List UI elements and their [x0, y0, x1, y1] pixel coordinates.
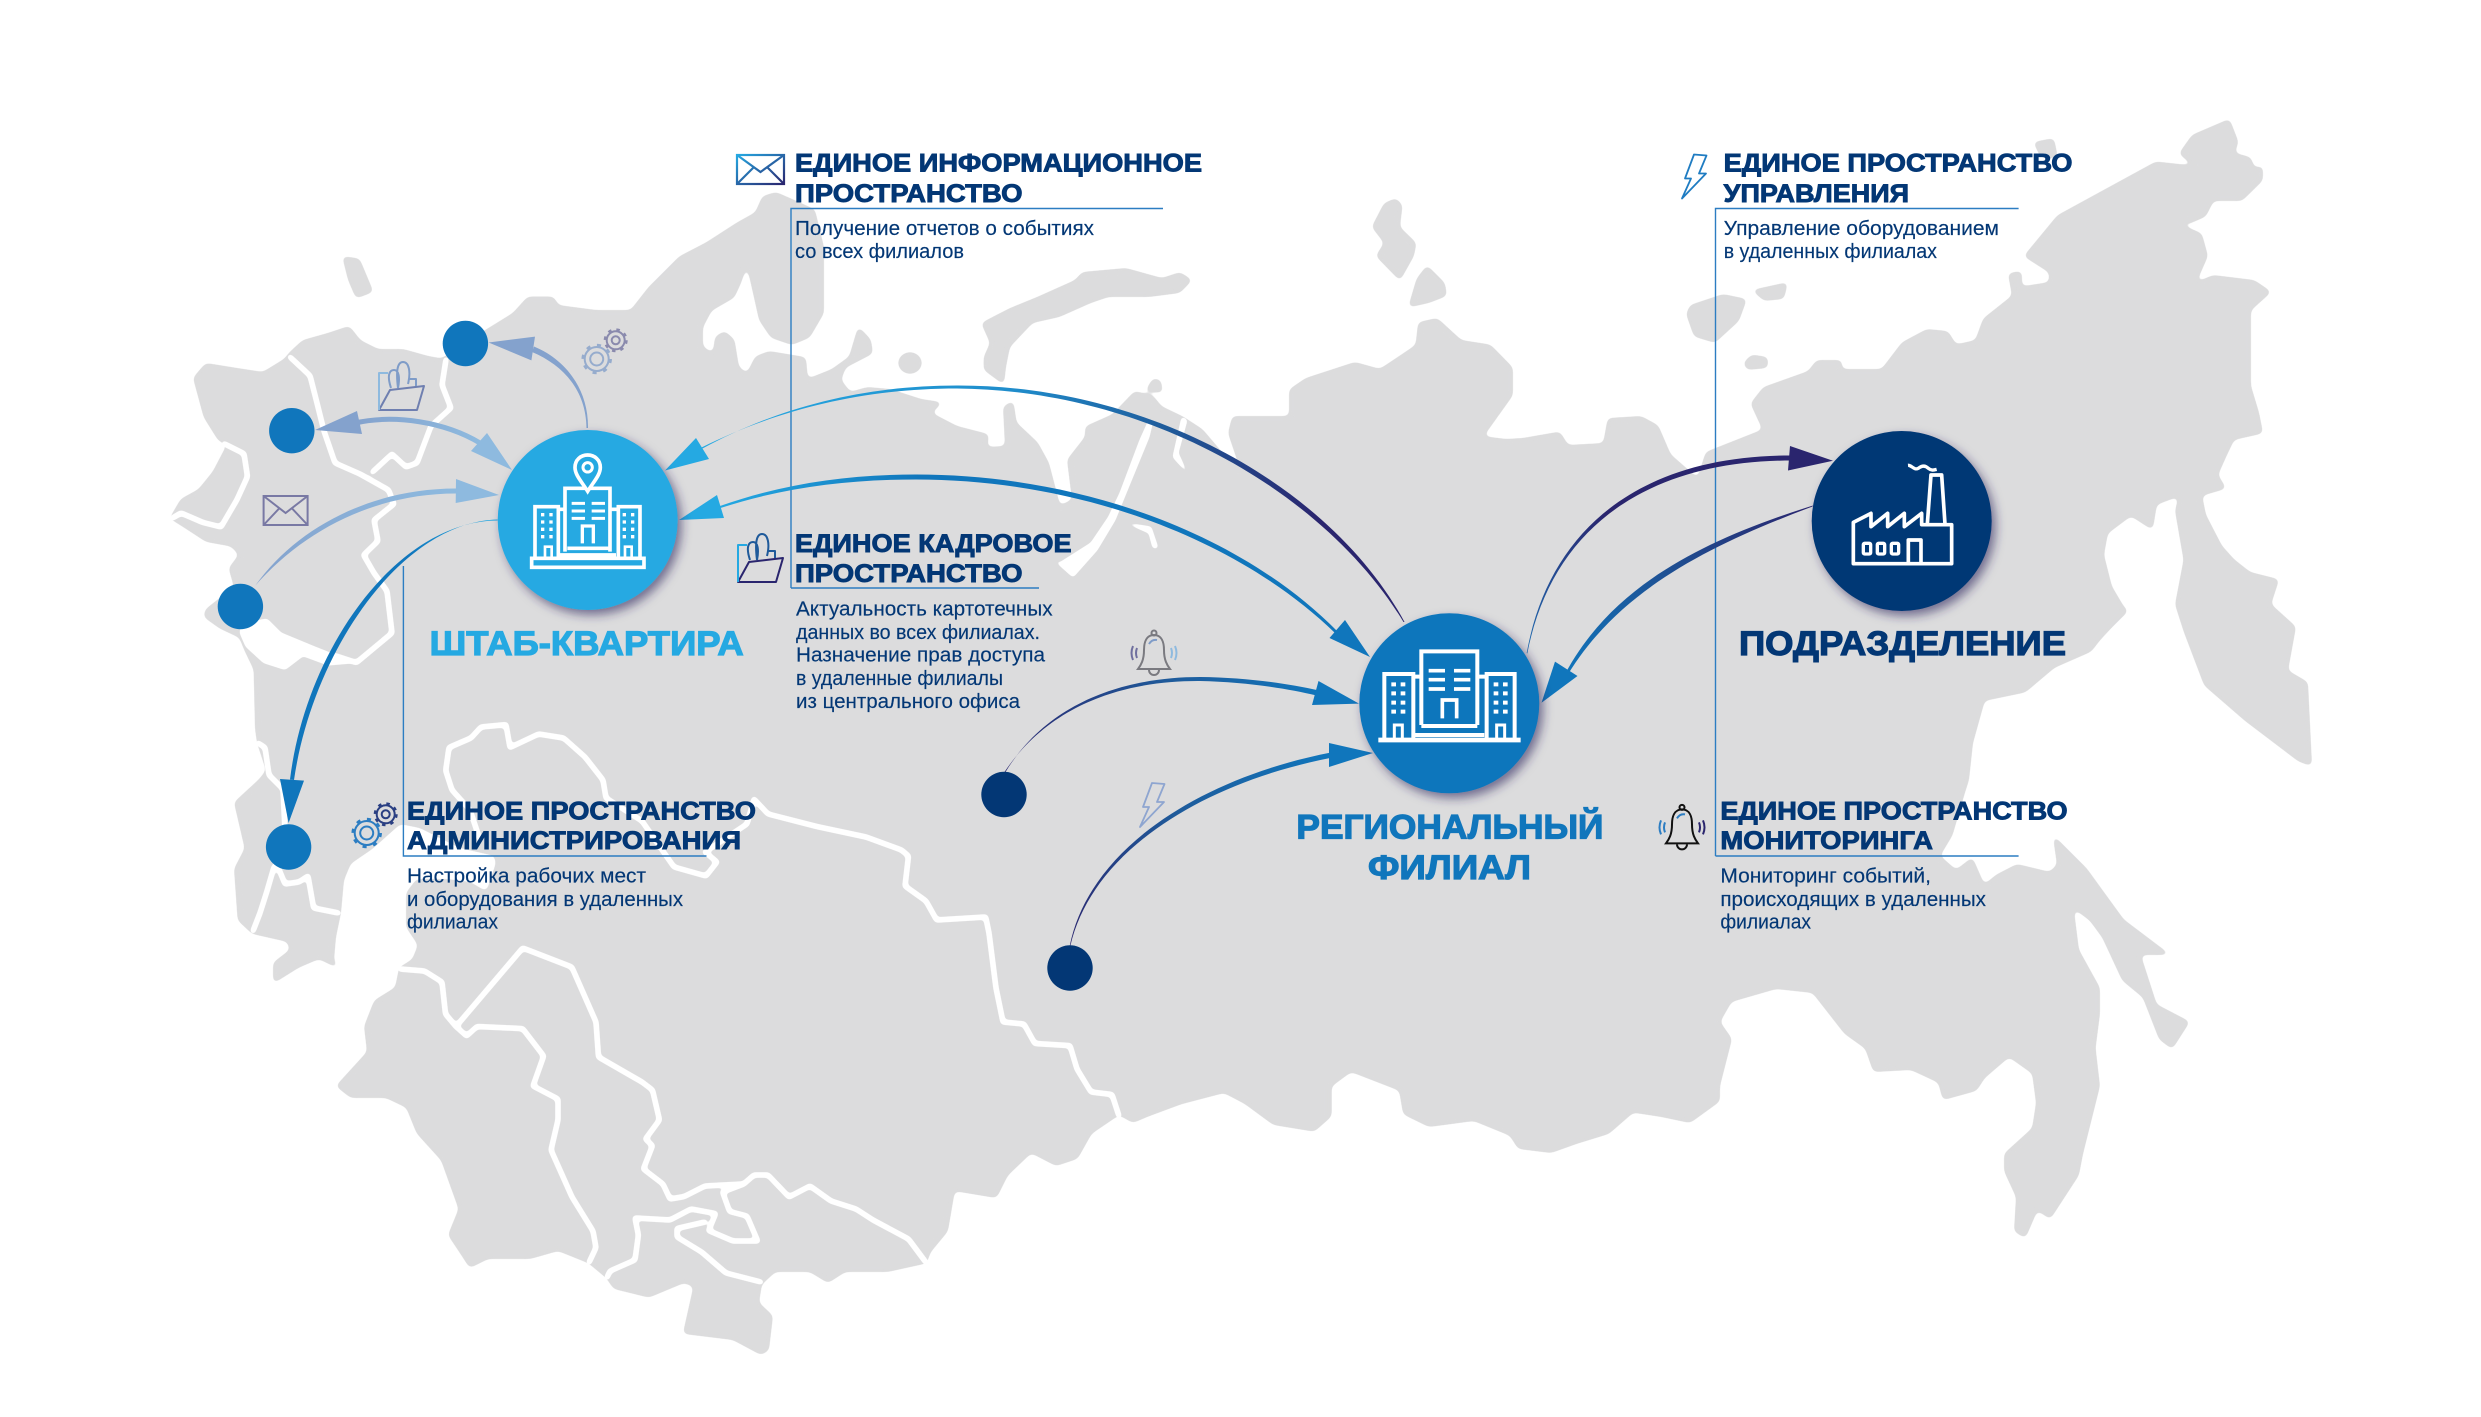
- heading: regional branch: РЕГИОНАЛЬНЫЙ: [1296, 808, 1603, 846]
- text block: management space: УПРАВЛЕНИЯ: [1724, 180, 1909, 208]
- node: regional branch circle with building icon: [1359, 613, 1539, 793]
- map island: New Siberian 1: [1686, 294, 1747, 343]
- icon: gears muted: [583, 330, 626, 372]
- text block: HR space: Актуальность картотечных: [796, 599, 1053, 621]
- arrow: subdivision to regional branch: [1542, 506, 1813, 703]
- text block: management space: [1724, 149, 2072, 263]
- map island: New Siberian 3: [1743, 354, 1768, 370]
- icon: building with location pin: [532, 455, 644, 567]
- icon: bell muted: [1132, 630, 1176, 675]
- text block: administration space: АДМИНИСТРИРОВАНИЯ: [407, 827, 741, 855]
- icon: envelope muted: [264, 496, 308, 525]
- map: national borders: [172, 357, 1119, 1282]
- text block: monitoring space: происходящих в удаленных: [1720, 889, 1986, 911]
- branch dot: lower left: [218, 584, 263, 629]
- icon: gears: [353, 804, 396, 846]
- map island: Novaya Zemlya: [981, 268, 1192, 385]
- heading: subdivision: ПОДРАЗДЕЛЕНИЕ: [1739, 625, 2066, 663]
- water: inner gulfs and lakes: [240, 413, 2234, 670]
- text block: administration space: филиалах: [407, 912, 498, 934]
- callout frame lines: [403, 208, 2019, 856]
- map island: New Siberian 2: [1752, 282, 1788, 301]
- branch dot: left: [269, 408, 314, 453]
- map: CIS territory: [171, 120, 2311, 1354]
- map mainland: [171, 120, 2311, 1354]
- text block: management space: ЕДИНОЕ ПРОСТРАНСТВО: [1724, 149, 2072, 177]
- text block: information space: [795, 149, 1202, 263]
- text block: administration space: [407, 797, 756, 934]
- text block: administration space: Настройка рабочих мест: [407, 866, 646, 888]
- text block: administration space: ЕДИНОЕ ПРОСТРАНСТВО: [407, 797, 756, 825]
- text block: monitoring space: [1720, 797, 2068, 934]
- arrow: regional branch to HQ, upper arc: [665, 385, 1404, 622]
- icon: factory: [1853, 465, 1952, 564]
- map island: Wrangel: [2033, 138, 2058, 158]
- text block: HR space: Назначение прав доступа: [796, 645, 1046, 667]
- text block: administration space: и оборудования в удаленных: [407, 889, 683, 911]
- arrow: HQ to top branch dot: [489, 337, 588, 428]
- text block: management space: в удаленных филиалах: [1724, 241, 1937, 263]
- map island: small arctic 2: [1145, 378, 1163, 393]
- map island: small arctic: [898, 352, 922, 374]
- icon: lightning bolt muted: [1140, 783, 1164, 827]
- text block: information space: Получение отчетов о событиях: [795, 218, 1094, 240]
- branch dot: top: [443, 321, 488, 366]
- branch dot: south: [266, 824, 311, 870]
- arrow: HQ to south branch dot: [280, 520, 498, 823]
- arrow: dark dot two to regional branch: [1070, 743, 1373, 946]
- subdivision dot: one: [981, 772, 1027, 817]
- text block: monitoring space: МОНИТОРИНГА: [1720, 827, 1933, 855]
- text block: information space: со всех филиалов: [795, 241, 964, 263]
- node: subdivision circle with factory icon: [1812, 431, 1992, 611]
- icon: lightning bolt: [1682, 154, 1706, 198]
- text block: HR space: из центрального офиса: [796, 691, 1021, 713]
- heading: regional branch: [1296, 808, 1603, 887]
- subdivision dot: two: [1047, 945, 1093, 991]
- text block: HR space: в удаленные филиалы: [796, 668, 1003, 690]
- icon: office buildings: [1378, 651, 1521, 740]
- text block: information space: ПРОСТРАНСТВО: [795, 180, 1022, 208]
- heading: headquarters: ШТАБ-КВАРТИРА: [430, 625, 744, 663]
- text block: HR space: ПРОСТРАНСТВО: [795, 560, 1022, 588]
- text block: management space: Управление оборудованием: [1724, 218, 1999, 240]
- arrow: HQ and left branch dot, two-way: [315, 411, 512, 470]
- text block: HR space: ЕДИНОЕ КАДРОВОЕ: [795, 530, 1072, 558]
- text block: monitoring space: ЕДИНОЕ ПРОСТРАНСТВО: [1720, 797, 2068, 825]
- text block: information space: ЕДИНОЕ ИНФОРМАЦИОННОЕ: [795, 149, 1202, 177]
- map island: Severnaya Zemlya 1: [1372, 198, 1416, 281]
- icon: bell: [1660, 805, 1704, 849]
- arrow: HQ to regional branch, lower arc: [679, 474, 1370, 657]
- text block: HR space: [795, 530, 1072, 713]
- icon: folder with people muted: [379, 362, 424, 410]
- map island: Svalbard-like: [342, 256, 374, 299]
- node: headquarters circle with building and pin icon: [498, 430, 678, 610]
- icon: folder with people: [738, 534, 783, 582]
- arrow: lower left branch dot to HQ: [254, 479, 499, 586]
- text block: monitoring space: Мониторинг событий,: [1720, 866, 1931, 888]
- heading: regional branch: ФИЛИАЛ: [1368, 849, 1531, 887]
- icon: envelope: [737, 155, 784, 184]
- text block: monitoring space: филиалах: [1720, 912, 1811, 934]
- arrow: regional branch to subdivision: [1527, 446, 1833, 654]
- map island: Severnaya Zemlya 2: [1408, 265, 1447, 308]
- arrow: dark dot one to regional branch: [1004, 677, 1359, 772]
- text block: HR space: данных во всех филиалах.: [796, 622, 1040, 644]
